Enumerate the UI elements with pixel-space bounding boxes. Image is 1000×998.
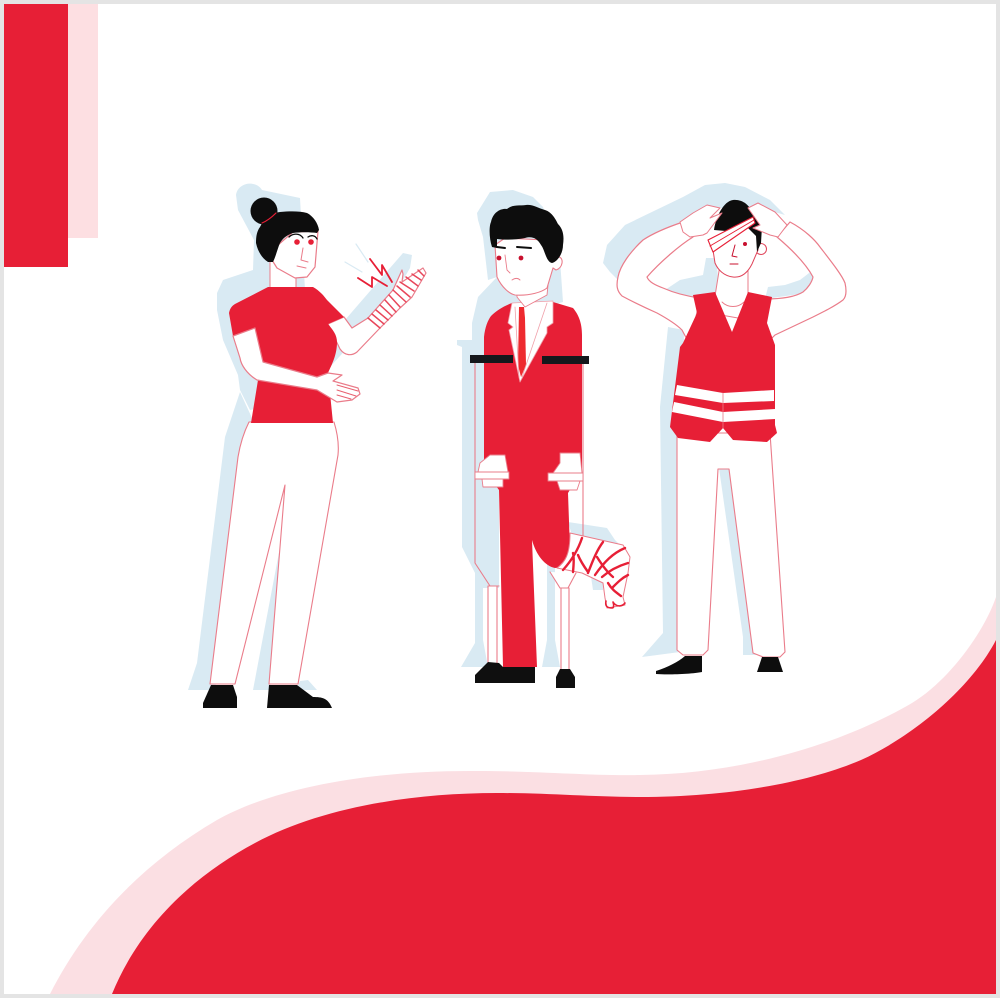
hair tie	[262, 213, 276, 223]
shadow: worker between legs	[719, 468, 756, 655]
left arm	[617, 222, 700, 345]
neck crease	[721, 302, 744, 318]
right shoe	[757, 657, 783, 672]
left crutch top bar	[470, 355, 513, 363]
cast toes	[606, 601, 625, 608]
eye left	[294, 239, 300, 245]
neck and collar	[517, 285, 548, 307]
right crutch stem	[561, 588, 569, 670]
hair	[714, 200, 762, 252]
left crutch frame	[475, 362, 499, 586]
head bandage	[708, 217, 755, 252]
right hand	[748, 203, 787, 237]
left crutch grip	[475, 472, 509, 479]
leg cast	[557, 533, 630, 608]
corner decoration: red bar	[4, 4, 68, 267]
nose and mouth	[505, 255, 520, 280]
finger lines	[337, 385, 358, 399]
cast stripes	[563, 538, 628, 596]
eyebrow left	[497, 247, 505, 248]
lower arm and hand	[233, 328, 360, 402]
shadow: leg cast	[568, 522, 623, 590]
shadow: woman between legs	[253, 490, 285, 690]
left shoe	[475, 662, 535, 683]
curly hair	[490, 205, 563, 263]
eyebrows	[289, 234, 317, 239]
tie	[518, 307, 526, 377]
shirt	[229, 287, 344, 423]
pants	[677, 433, 785, 657]
pain bolts	[358, 259, 392, 287]
nose and mouth	[730, 245, 738, 264]
eyebrow right	[517, 247, 531, 248]
neck	[270, 258, 296, 290]
bandage line	[710, 220, 754, 246]
face	[713, 222, 758, 277]
bottom wave: red	[112, 640, 996, 994]
vest reflective stripes	[672, 385, 775, 422]
eye right	[519, 256, 523, 260]
eye left	[497, 256, 501, 260]
right crutch grip	[548, 473, 583, 481]
shadow: worker arms	[603, 183, 785, 280]
pain bolt shadow lines	[345, 244, 368, 272]
shadow: worker body strip	[642, 327, 684, 657]
shirt front and lapels	[508, 301, 553, 382]
left crutch stem	[488, 586, 497, 664]
right crutch top bar	[542, 356, 589, 364]
lapel lines	[515, 303, 547, 377]
right hand on crutch	[553, 453, 582, 490]
shadow: woman left leg strip	[188, 392, 252, 690]
ear	[756, 244, 766, 254]
figure: worker with head bandage	[617, 200, 846, 674]
bottom wave: pink	[50, 597, 996, 994]
figure: man on crutches with leg cast	[470, 205, 630, 688]
hair	[256, 211, 319, 262]
wrist bandage	[368, 270, 424, 328]
face	[272, 231, 318, 278]
nose and mouth	[297, 248, 308, 268]
left hand on crutch	[478, 455, 508, 487]
shadow: man right crutch	[542, 560, 560, 667]
figure shadows	[188, 183, 813, 690]
eye	[743, 242, 747, 246]
suit	[484, 302, 582, 667]
neck	[715, 265, 748, 340]
safety vest	[670, 292, 777, 442]
right crutch frame	[550, 364, 583, 588]
right shoe on crutch tip	[556, 669, 575, 688]
shadow: worker inside right arm	[765, 270, 813, 299]
corner decoration: pink bar	[68, 4, 98, 238]
shadow: woman upper body	[217, 184, 412, 410]
bun	[250, 198, 278, 224]
raised arm	[328, 268, 426, 355]
left shoe	[203, 685, 237, 708]
figure: woman with bandaged wrist	[203, 198, 426, 708]
left hand	[680, 205, 722, 237]
shadow: man upper body and crutch	[457, 190, 563, 667]
pants	[210, 422, 338, 684]
face	[495, 238, 562, 295]
eye right	[308, 239, 314, 245]
shadow: woman shoe	[296, 680, 317, 690]
right arm	[765, 222, 846, 345]
left shoe	[656, 656, 702, 674]
vest centre seam	[722, 393, 724, 428]
shadow: worker inside left arm	[665, 258, 720, 299]
right shoe	[267, 685, 332, 708]
